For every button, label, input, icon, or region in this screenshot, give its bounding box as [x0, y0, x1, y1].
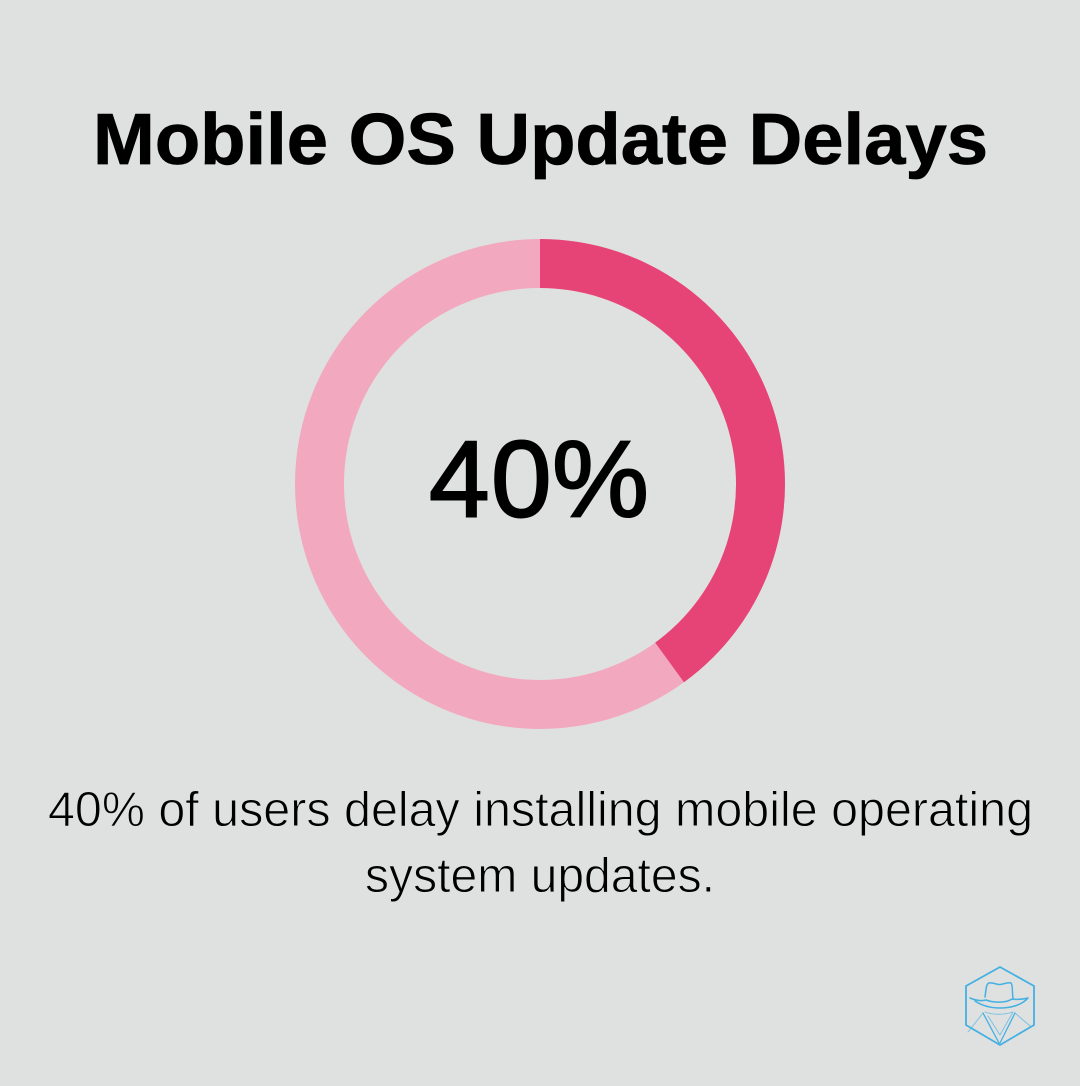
icon: spy logo hexagon — [966, 967, 1034, 1045]
donut track: remaining 60 percent — [320, 264, 760, 704]
donut chart: 40 percent — [320, 239, 785, 704]
donut segment: 40 percent — [540, 239, 785, 682]
description text — [48, 783, 1033, 903]
description text: 40% of users delay installing mobile operating — [48, 783, 1033, 837]
center value: 40% — [429, 418, 649, 540]
description text: system updates. — [365, 849, 715, 903]
title: Mobile OS Update Delays — [93, 100, 988, 180]
